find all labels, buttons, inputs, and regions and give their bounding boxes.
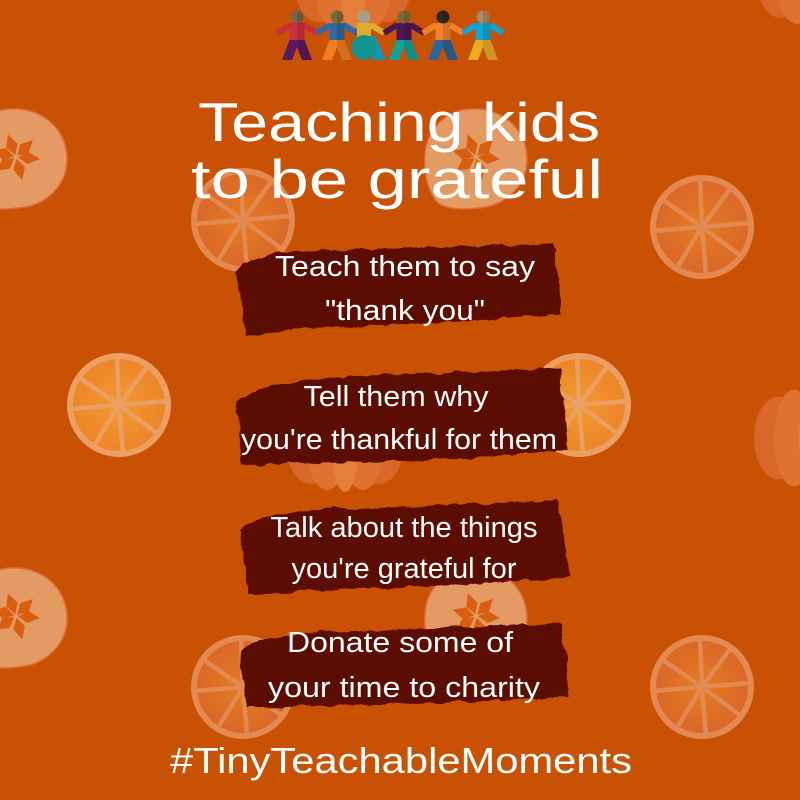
- tip 4 banner: [240, 623, 569, 708]
- hashtag: #TinyTeachableMoments: [170, 740, 632, 781]
- person 2: [317, 10, 357, 60]
- tip 4 banner: Donate some of: [287, 627, 514, 659]
- person 3 in wheelchair: [352, 10, 386, 60]
- title: Teaching kids: [198, 91, 600, 153]
- tip 2 banner: [236, 368, 568, 465]
- orange slice top right: [650, 175, 754, 279]
- orange slice bottom left: [191, 635, 295, 739]
- logo: row of people holding hands: [277, 10, 503, 60]
- tip 1 banner: "thank you": [325, 295, 485, 327]
- orange slice top left: [191, 168, 295, 272]
- tip 1 banner: [236, 244, 561, 336]
- person 5: [423, 10, 463, 60]
- tip 2 banner: you're thankful for them: [241, 424, 557, 456]
- pumpkin top centre: [295, 0, 411, 30]
- tip 3 banner: you're grateful for: [292, 553, 517, 585]
- person 6: [463, 10, 503, 60]
- apple slice lower centre: [425, 568, 527, 668]
- person 1: [277, 10, 317, 60]
- orange slice middle left: [67, 353, 171, 457]
- title: to be grateful: [191, 148, 603, 210]
- orange slice bottom right: [650, 635, 754, 739]
- apple slice lower left: [0, 568, 67, 668]
- apple slice upper centre: [425, 109, 527, 209]
- tip 1 banner: Teach them to say: [275, 251, 536, 283]
- pumpkin top right: [757, 0, 800, 26]
- pumpkin right edge: [754, 387, 800, 489]
- tip 2 banner: Tell them why: [304, 381, 489, 413]
- orange slice middle right: [527, 353, 631, 457]
- person 4: [384, 10, 424, 60]
- apple slice upper left: [0, 109, 67, 209]
- title: [191, 91, 603, 210]
- tip 3 banner: Talk about the things: [270, 512, 538, 544]
- tip 4 banner: your time to charity: [268, 672, 541, 704]
- tip 3 banner: [240, 500, 570, 594]
- pumpkin lower centre: [287, 404, 403, 492]
